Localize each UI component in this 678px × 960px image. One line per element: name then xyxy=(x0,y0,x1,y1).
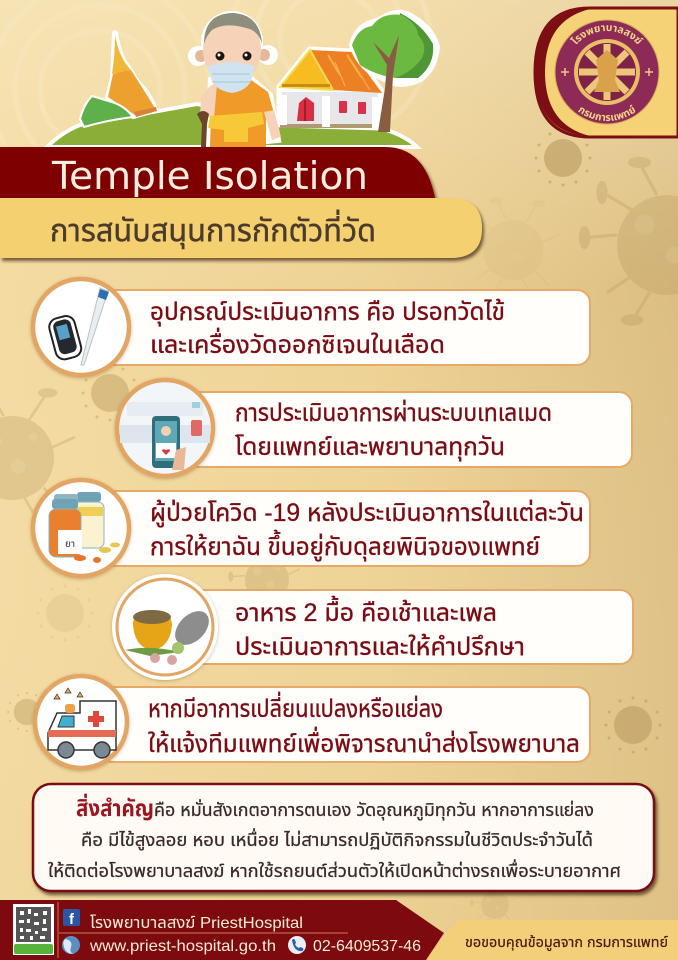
QR code xyxy=(13,904,54,955)
callout: important notice: ให้ติดต่อโรงพยาบาลสงฆ์ หากใช้รถยนต์ส่วนตัวให้เปิดหน้าต่างรถเพื่อระบายอากาศ xyxy=(48,859,621,881)
callout: important notice xyxy=(33,784,654,891)
phone number: 02-6409537-46 xyxy=(313,938,421,955)
text box: อาหาร 2 มื้อ คือเช้าและเพล xyxy=(235,595,497,627)
text box: ให้แจ้งทีมแพทย์เพื่อพิจารณานำส่งโรงพยาบาล xyxy=(148,726,580,758)
icon: medicine bottles xyxy=(33,480,129,576)
title banner: Temple Isolation xyxy=(51,154,368,198)
icon: stupa xyxy=(108,33,157,117)
subtitle banner: การสนับสนุนการกักตัวที่วัด xyxy=(50,209,376,249)
icon: telemedicine phone xyxy=(117,380,213,476)
icon: oximeter and thermometer xyxy=(33,279,129,375)
hospital name: โรงพยาบาลสงฆ์ PriestHospital xyxy=(90,915,303,932)
panel: item 2 xyxy=(117,380,632,476)
panel: item 1 xyxy=(33,279,590,375)
text box: ประเมินอาการและให้คำปรึกษา xyxy=(235,633,525,661)
logo panel xyxy=(534,6,678,138)
icon: alms bowl xyxy=(112,574,218,680)
panel: item 5 xyxy=(35,676,590,768)
text box xyxy=(100,491,590,566)
text box: การให้ยาฉัน ขึ้นอยู่กับดุลยพินิจของแพทย์ xyxy=(150,529,540,562)
icon: medicine bottles: ยา xyxy=(65,539,75,550)
icon: facebook: f xyxy=(69,911,75,928)
subtitle banner xyxy=(0,198,482,258)
icon: temple xyxy=(280,50,382,128)
icon: globe xyxy=(62,936,80,954)
icon: ambulance xyxy=(35,676,127,768)
hill xyxy=(47,104,417,147)
emblem: hospital seal: กรมการแพทย์ xyxy=(578,104,636,122)
text box: การประเมินอาการผ่านระบบเทเลเมด xyxy=(235,399,552,427)
text box: ผู้ป่วยโควิด -19 หลังประเมินอาการในแต่ละวัน xyxy=(150,499,584,528)
footer: thanks: ขอขอบคุณข้อมูลจาก กรมการแพทย์ xyxy=(465,934,668,951)
text box xyxy=(100,687,590,762)
website: www.priest-hospital.go.th xyxy=(89,938,276,955)
panel: item 3 xyxy=(33,480,590,576)
text box: อุปกรณ์ประเมินอาการ คือ ปรอทวัดไข้ xyxy=(150,298,505,327)
callout: important notice: คือ หมั่นสังเกตอาการตนเอง วัดอุณหภูมิทุกวัน หากอาการแย่ลง xyxy=(154,799,594,822)
text box xyxy=(180,392,632,467)
icon: phone xyxy=(288,936,306,954)
panel: item 4 xyxy=(112,574,633,680)
text box: หากมีอาการเปลี่ยนแปลงหรือแย่ลง xyxy=(148,691,443,723)
footer: contact xyxy=(0,900,444,960)
callout: important notice: คือ มีไข้สูงลอย หอบ เหนื่อย ไม่สามารถปฏิบัติกิจกรรมในชีวิตประจำวันได้ xyxy=(81,828,593,852)
footer: thanks xyxy=(426,920,678,960)
icon: monk xyxy=(188,11,281,147)
icon: bush xyxy=(80,96,133,127)
icon: facebook xyxy=(63,909,80,928)
text box xyxy=(180,590,633,664)
title banner xyxy=(0,147,435,198)
emblem: hospital seal: โรงพยาบาลสงฆ์ xyxy=(570,25,644,44)
emblem: hospital seal xyxy=(554,20,660,124)
icon: tree xyxy=(352,13,436,132)
text box: และเครื่องวัดออกซิเจนในเลือด xyxy=(150,327,445,359)
illustration: monk and temple xyxy=(47,11,436,147)
callout: important notice: สิ่งสำคัญ xyxy=(76,793,154,821)
text box: โดยแพทย์และพยาบาลทุกวัน xyxy=(235,433,505,462)
text box xyxy=(100,290,590,365)
